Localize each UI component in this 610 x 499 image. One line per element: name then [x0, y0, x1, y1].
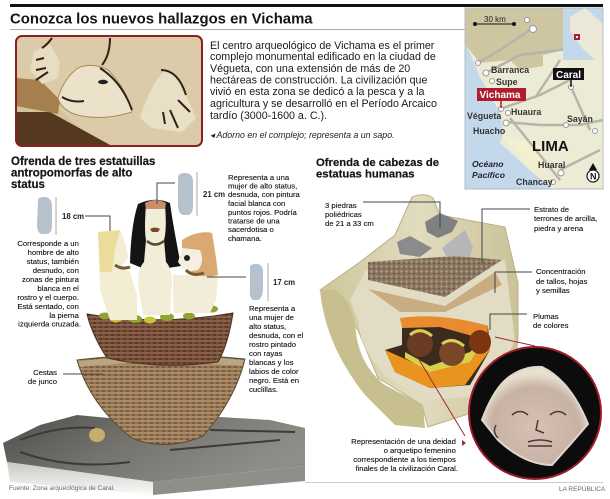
map labels: Végueta: [467, 111, 501, 121]
labels: niche: de colores: [533, 321, 569, 330]
text: right statuette: con rayas: [249, 349, 282, 358]
silhouette: 18 cm: 18 cm: [62, 212, 84, 221]
text: left statuette: desnudo, con: [33, 266, 79, 275]
text: left statuette: la pierna: [49, 311, 80, 320]
photo caption: ◂ Adorno en el complejo; representa a un sapo.: [210, 130, 395, 140]
text: right statuette: rostro pintado: [249, 340, 296, 349]
text: central statuette: facial blanca con: [228, 199, 285, 208]
source: Fuente: Zona arqueológica de Caral.: [9, 485, 115, 492]
text: right statuette: desnuda, con el: [249, 331, 304, 340]
heading: human heads: estatuas humanas: [316, 168, 415, 180]
title: Conozca los nuevos hallazgos en Vichama: [10, 12, 313, 28]
intro text: Végueta, con una extensión de más de 20: [210, 63, 410, 75]
silhouette: 21 cm: [178, 172, 225, 216]
map labels: Barranca: [491, 65, 529, 75]
layer: stems and seeds: [368, 272, 502, 312]
text: left statuette: hombre de alto: [28, 248, 79, 257]
map labels: Sayán: [567, 114, 593, 124]
map labels: LIMA: [532, 138, 569, 155]
intro text: hectáreas de construcción. La civilización que: [210, 74, 427, 86]
map labels: Huacho: [473, 126, 506, 136]
map labels: Océano: [472, 159, 504, 169]
text: right statuette: negro. Está en: [249, 376, 299, 385]
text: left statuette: blanca en el: [37, 284, 79, 293]
text: central statuette: sacerdotisa o: [228, 225, 274, 234]
text: central statuette: chamana.: [228, 234, 262, 243]
silhouette: 17 cm: 17 cm: [273, 278, 295, 287]
caption: deity: o arquetipo femenino: [384, 446, 456, 455]
photo: toad relief: [16, 36, 202, 146]
red connector lines: [418, 337, 535, 436]
intro text: complejo monumental edificado en la ciudad de: [210, 51, 436, 63]
map labels: Huaura: [511, 107, 541, 117]
label: Caral: [553, 68, 584, 87]
icon: north compass: [587, 163, 599, 182]
statuette: central figure: [130, 200, 181, 315]
silhouette: 18 cm: [37, 197, 84, 235]
silhouette: 21 cm: 21 cm: [203, 190, 225, 199]
heading: three statuettes: status: [11, 179, 45, 191]
map labels: [467, 65, 593, 187]
text: right statuette: labios de color: [249, 367, 299, 376]
labels: niche: de tallos, hojas: [536, 277, 587, 286]
map labels: Huaral: [538, 160, 565, 170]
map labels: Supe: [496, 77, 518, 87]
credit: LA REPÚBLICA: [559, 484, 606, 493]
labels: niche: Estrato de: [534, 205, 569, 214]
layer: clay and stone stratum: [368, 256, 502, 297]
text: right statuette: Representa a: [249, 304, 296, 313]
text: right statuette: blancas y los: [249, 358, 294, 367]
scale bar: 30 km: [484, 15, 506, 24]
map labels: Pacífico: [472, 170, 505, 180]
text: central statuette: puntos rojos. Podría: [228, 208, 298, 217]
feathers and heads bundle: [385, 316, 491, 388]
caption: deity: Representación de una deidad: [351, 437, 456, 446]
upper basket: [87, 313, 233, 365]
caption: deity: finales de la civilización Caral.: [355, 464, 458, 473]
text: right statuette: alto status,: [249, 322, 286, 331]
text: central statuette: mujer de alto status,: [228, 182, 297, 190]
labels: niche: [325, 201, 597, 330]
label: rush baskets: [28, 368, 103, 386]
intro text: vivió en esta zona se dedicó a la pesca y a la: [210, 86, 425, 98]
text: left statuette: Corresponde a un: [17, 239, 79, 248]
label: rush baskets: Cestas: [33, 368, 57, 377]
label: Vichama: Vichama: [480, 90, 521, 101]
map labels: Chancay: [516, 177, 553, 187]
text: right statuette: cuclillas.: [249, 385, 278, 394]
label: Caral: Caral: [556, 70, 581, 81]
intro text: agricultura y se desarrolló en el Período Arcaico: [210, 98, 437, 110]
inset map of Peru: [563, 8, 603, 60]
mask close-up: [469, 347, 601, 479]
text: left statuette: rostro y el cuerpo.: [17, 293, 79, 302]
text: left statuette: Está sentado, con: [17, 302, 79, 311]
labels: niche: Plumas: [533, 312, 559, 321]
caption: deity: correspondiente a los tiempos: [353, 455, 456, 464]
map: [465, 8, 603, 189]
labels: niche: Concentración: [536, 267, 586, 276]
silhouette: 17 cm: [250, 263, 295, 301]
text: left statuette: status, también: [27, 257, 79, 266]
text: left statuette: izquierda cruzada.: [18, 320, 81, 328]
stone base: [3, 415, 305, 495]
stones: [397, 213, 473, 257]
labels: niche: terrones de arcilla,: [534, 214, 597, 223]
heading: three statuettes: antropomorfas de alto: [11, 168, 132, 180]
statuette: right figure: [173, 232, 218, 313]
label: Vichama: [477, 88, 526, 108]
labels: niche: de 21 a 33 cm: [325, 219, 374, 228]
scale bar: [473, 15, 516, 26]
text: central statuette: desnuda, con pintura: [228, 190, 301, 199]
labels: niche: poliédricas: [325, 210, 362, 219]
statuette: left figure: [98, 230, 137, 320]
cutaway niche: [320, 195, 518, 428]
icon: north compass: N: [590, 172, 596, 182]
leader lines: niche: [363, 202, 532, 330]
heading: three statuettes: Ofrenda de tres estatuillas: [11, 156, 155, 168]
top rule: [10, 4, 603, 7]
lower basket: [77, 355, 245, 445]
labels: niche: 3 piedras: [325, 201, 357, 210]
heading: human heads: Ofrenda de cabezas de: [316, 157, 439, 169]
text: central statuette: Representa a una: [228, 173, 290, 182]
ground line: [305, 482, 603, 483]
caption: deity: [351, 437, 466, 473]
text: left statuette: zonas de pintura: [22, 275, 80, 284]
labels: niche: piedra y arena: [534, 224, 584, 233]
label: rush baskets: de junco: [28, 377, 57, 386]
fruit in basket: [99, 306, 218, 324]
text: right statuette: una mujer de: [249, 313, 294, 322]
intro text: El centro arqueológico de Vichama es el primer: [210, 40, 435, 52]
labels: niche: y semillas: [536, 286, 570, 295]
intro text: tardío (3000-1600 a. C.).: [210, 110, 327, 122]
text: central statuette: tratarse de una: [228, 216, 280, 226]
